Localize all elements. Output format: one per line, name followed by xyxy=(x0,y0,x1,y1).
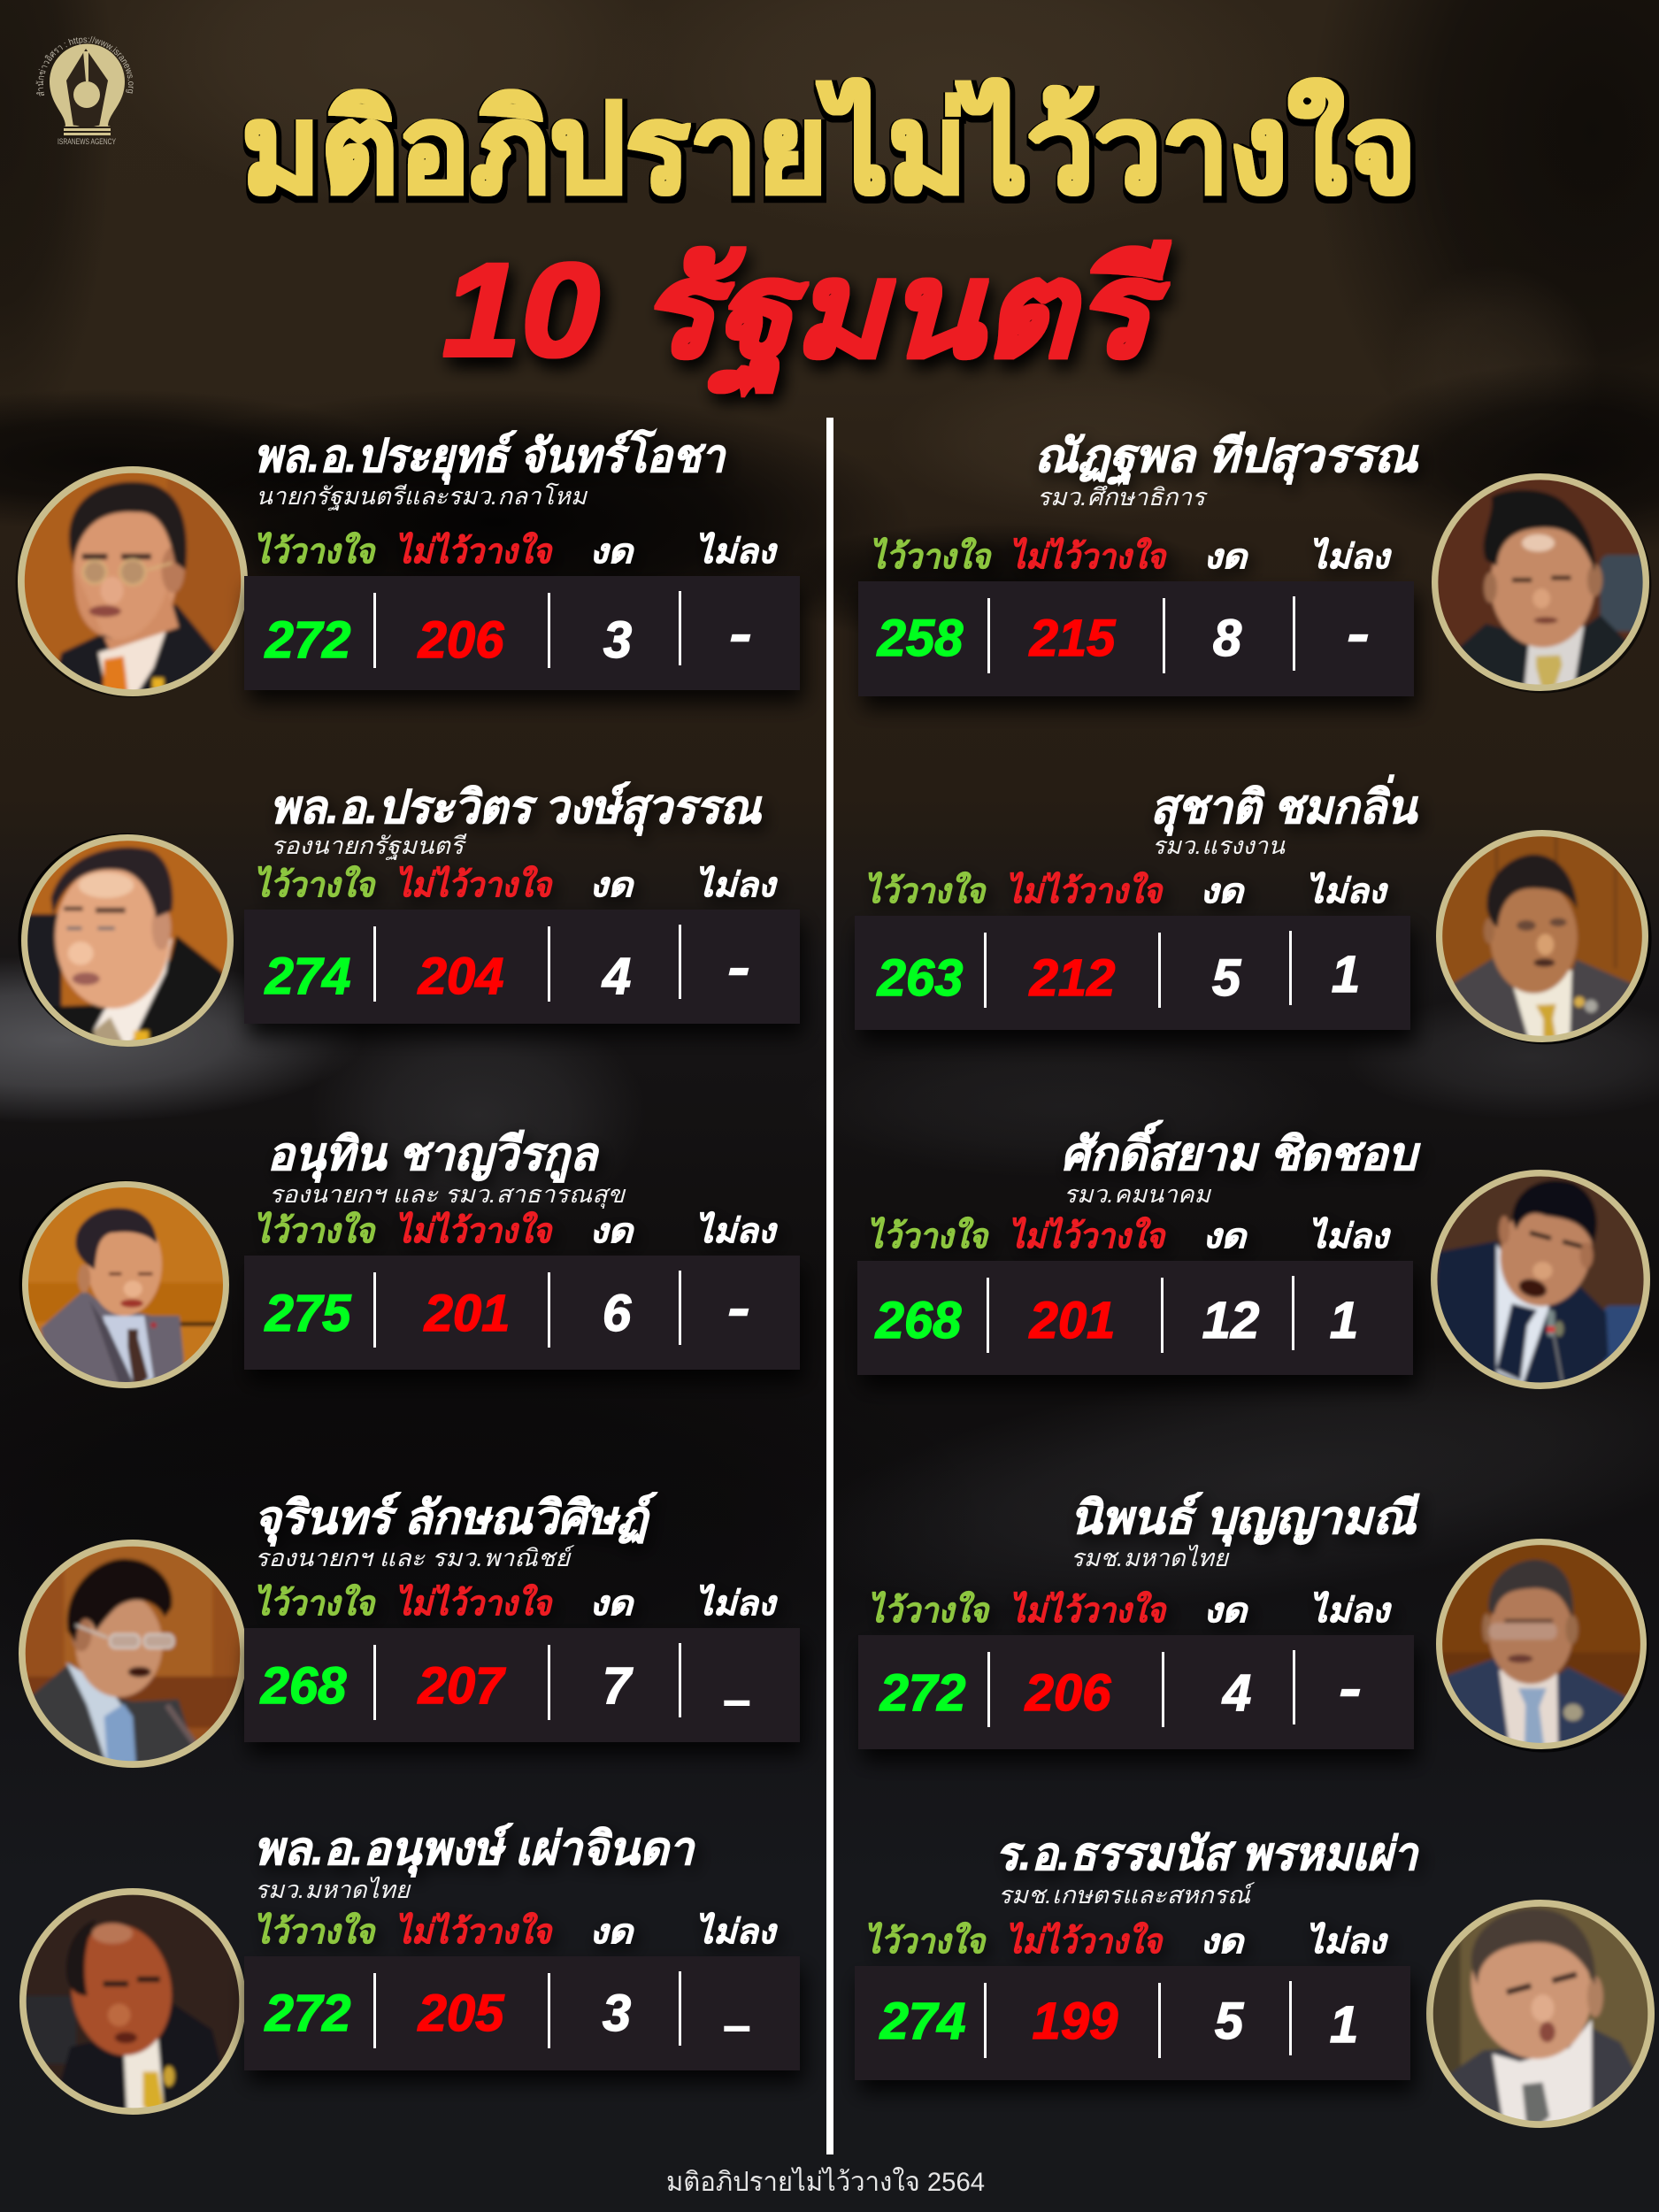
name: ศักดิ์สยาม ชิดชอบ xyxy=(1061,1120,1421,1180)
column labels: งด xyxy=(589,1213,635,1250)
vote numbers: 215 xyxy=(1029,610,1116,667)
portrait: Nataphol xyxy=(1432,473,1651,693)
vote numbers: 7 xyxy=(603,1657,634,1715)
column labels: ไว้วางใจ xyxy=(254,1211,377,1250)
table background xyxy=(244,576,800,690)
column labels: ไว้วางใจ xyxy=(867,1217,990,1256)
vote numbers: 268 xyxy=(260,1657,347,1715)
vote table xyxy=(244,1211,800,1370)
vote table xyxy=(244,1584,800,1742)
vote numbers xyxy=(265,939,750,1005)
portrait: Anutin xyxy=(19,1180,229,1388)
vote numbers: 258 xyxy=(877,610,964,667)
column labels: ไม่ไว้วางใจ xyxy=(1010,1591,1168,1630)
vote numbers: 4 xyxy=(1222,1664,1251,1722)
vote table xyxy=(855,1922,1410,2080)
column labels: งด xyxy=(1200,873,1246,910)
column labels: ไม่ไว้วางใจ xyxy=(1010,537,1168,576)
vote numbers xyxy=(879,1660,1361,1722)
vote numbers: 274 xyxy=(879,1993,965,2050)
vote numbers: 207 xyxy=(418,1657,506,1715)
column labels: ไว้วางใจ xyxy=(864,872,987,910)
role: รมว.คมนาคม xyxy=(1064,1181,1211,1208)
vote numbers: 263 xyxy=(877,949,963,1007)
name: อนุทิน ชาญวีรกูล xyxy=(267,1129,600,1183)
column labels: ไม่ไว้วางใจ xyxy=(1009,1217,1167,1256)
vote numbers xyxy=(879,1993,1358,2054)
vote numbers: 201 xyxy=(424,1285,510,1342)
panel: Anutin xyxy=(19,1129,800,1388)
column labels: งด xyxy=(1203,1593,1249,1630)
panel: Prawit xyxy=(18,781,800,1047)
name: สุชาติ ชมกลิ่น xyxy=(1150,774,1418,836)
column labels: ไม่ลง xyxy=(1310,1591,1393,1630)
table background xyxy=(855,1966,1410,2080)
vote table xyxy=(244,532,800,690)
column labels xyxy=(254,532,779,571)
column labels: ไม่ไว้วางใจ xyxy=(396,865,554,904)
panel: Suchart xyxy=(855,774,1652,1044)
portrait: Nipon xyxy=(1436,1539,1648,1753)
vote table xyxy=(858,537,1414,696)
table background xyxy=(244,910,800,1024)
role: รมช.เกษตรและสหกรณ์ xyxy=(998,1882,1256,1909)
panel: Saksayam xyxy=(857,1120,1650,1389)
column labels: งด xyxy=(1202,1218,1248,1256)
column labels: ไม่ลง xyxy=(1309,1217,1392,1256)
portrait: Prayut xyxy=(15,466,248,697)
column labels: งด xyxy=(589,534,635,571)
vote numbers: - xyxy=(727,939,750,996)
column labels: งด xyxy=(1203,539,1249,576)
column labels: ไม่ลง xyxy=(695,865,779,904)
role: รองนายกรัฐมนตรี xyxy=(271,833,467,861)
column labels: ไม่ลง xyxy=(1306,1922,1389,1961)
vote numbers: _ xyxy=(725,1652,750,1709)
column labels: ไว้วางใจ xyxy=(254,1912,377,1951)
vote numbers xyxy=(265,1279,750,1342)
role: รองนายกฯ และ รมว.สาธารณสุข xyxy=(269,1181,626,1210)
panel: Nipon xyxy=(858,1492,1648,1753)
role: รมว.มหาดไทย xyxy=(255,1876,411,1903)
table background xyxy=(244,1628,800,1742)
vote numbers: 3 xyxy=(603,611,632,669)
role: รองนายกฯ และ รมว.พาณิชย์ xyxy=(255,1545,575,1571)
column labels: งด xyxy=(589,1914,635,1951)
column labels xyxy=(254,1584,779,1623)
name: ณัฏฐพล ทีปสุวรรณ xyxy=(1034,431,1419,486)
vote numbers: 212 xyxy=(1029,949,1115,1007)
portrait: Jurin xyxy=(19,1540,247,1768)
panel: Thammanat xyxy=(855,1829,1655,2128)
role: นายกรัฐมนตรีและรมว.กลาโหม xyxy=(256,482,588,511)
portrait: Saksayam xyxy=(1431,1170,1650,1389)
column labels: ไม่ลง xyxy=(695,532,779,571)
column labels: ไม่ไว้วางใจ xyxy=(396,532,554,571)
name: พล.อ.ประยุทธ์ จันทร์โอชา xyxy=(254,428,727,485)
vote numbers: 1 xyxy=(1332,946,1360,1003)
vote numbers xyxy=(260,1652,750,1715)
vote numbers: 272 xyxy=(265,611,350,669)
vote numbers: - xyxy=(1340,1660,1361,1717)
table background xyxy=(855,916,1410,1030)
column labels: ไม่ลง xyxy=(695,1584,779,1623)
vote numbers xyxy=(875,1292,1358,1349)
table background xyxy=(244,1956,800,2070)
vote numbers xyxy=(877,605,1370,667)
vote numbers: 5 xyxy=(1215,1993,1244,2050)
column labels: ไว้วางใจ xyxy=(254,865,377,904)
column labels: ไม่ไว้วางใจ xyxy=(1006,1922,1164,1961)
column labels: งด xyxy=(589,867,635,904)
column labels: งด xyxy=(589,1586,635,1623)
vote numbers: 199 xyxy=(1033,1993,1118,2050)
panel: Anupong xyxy=(19,1823,800,2115)
column labels xyxy=(864,872,1389,910)
name: ร.อ.ธรรมนัส พรหมเผ่า xyxy=(995,1829,1420,1880)
column labels xyxy=(864,1922,1389,1961)
table background xyxy=(857,1261,1413,1375)
name: พล.อ.ประวิตร วงษ์สุวรรณ xyxy=(270,781,763,836)
portrait: Suchart xyxy=(1436,830,1652,1044)
column labels: ไม่ไว้วางใจ xyxy=(396,1584,554,1623)
table background xyxy=(244,1256,800,1370)
vote numbers: 8 xyxy=(1213,610,1242,667)
column labels: ไว้วางใจ xyxy=(864,1922,987,1961)
vote numbers: 1 xyxy=(1330,1996,1358,2054)
vote numbers: 3 xyxy=(603,1985,631,2042)
name: พล.อ.อนุพงษ์ เผ่าจินดา xyxy=(254,1823,696,1878)
vote numbers: 5 xyxy=(1212,949,1241,1007)
column labels: ไว้วางใจ xyxy=(870,537,993,576)
table background xyxy=(858,1635,1414,1749)
vote numbers: 204 xyxy=(418,948,503,1005)
vote numbers: 272 xyxy=(265,1985,350,2042)
column labels: ไม่ไว้วางใจ xyxy=(396,1211,554,1250)
vote numbers: 274 xyxy=(265,948,350,1005)
panel: Nataphol xyxy=(858,431,1651,696)
vote numbers xyxy=(265,1978,750,2042)
logo: Isranews Agency xyxy=(35,35,134,147)
vote numbers: - xyxy=(727,1279,750,1337)
column labels xyxy=(867,1217,1392,1256)
column labels: ไม่ลง xyxy=(1310,537,1393,576)
column labels: ไม่ลง xyxy=(695,1211,779,1250)
role: รมว.ศึกษาธิการ xyxy=(1037,484,1209,511)
vote numbers: - xyxy=(1347,605,1370,663)
column labels: ไว้วางใจ xyxy=(868,1591,991,1630)
column labels xyxy=(870,537,1393,576)
column labels xyxy=(254,865,779,904)
column labels xyxy=(868,1591,1393,1630)
vote table xyxy=(855,872,1410,1030)
vote numbers: 201 xyxy=(1029,1292,1115,1349)
logo: Isranews Agency: ISRANEWS AGENCY xyxy=(58,137,116,147)
vote numbers xyxy=(877,946,1360,1007)
vote numbers: 272 xyxy=(879,1664,965,1722)
vote numbers: _ xyxy=(725,1978,750,2035)
column labels: ไม่ไว้วางใจ xyxy=(396,1912,554,1951)
vote numbers: 1 xyxy=(1330,1292,1358,1349)
name: นิพนธ์ บุญญามณี xyxy=(1070,1492,1420,1547)
table background xyxy=(858,581,1414,696)
panel: Jurin xyxy=(19,1492,800,1768)
vote numbers: 268 xyxy=(875,1292,962,1349)
column labels xyxy=(254,1211,779,1250)
vote table xyxy=(244,865,800,1024)
vote numbers: 6 xyxy=(603,1285,632,1342)
column labels: ไม่ลง xyxy=(1306,872,1389,910)
role: รมช.มหาดไทย xyxy=(1071,1544,1230,1571)
vote numbers: 205 xyxy=(418,1985,504,2042)
name: จุรินทร์ ลักษณวิศิษฏ์ xyxy=(254,1492,658,1547)
role: รมว.แรงงาน xyxy=(1152,833,1286,859)
title: 10 ministers: 10 รัฐมนตรี xyxy=(442,235,1171,396)
vote numbers: 12 xyxy=(1202,1292,1259,1349)
column labels: ไม่ลง xyxy=(695,1912,779,1951)
portrait: Prawit xyxy=(18,833,234,1047)
panel: Prayut xyxy=(15,428,800,697)
vote table xyxy=(858,1591,1414,1749)
column labels xyxy=(254,1912,779,1951)
column labels: ไว้วางใจ xyxy=(254,1584,377,1623)
portrait: Anupong xyxy=(19,1888,246,2115)
vote table xyxy=(244,1912,800,2070)
vote numbers: - xyxy=(729,605,752,663)
centre divider xyxy=(826,418,833,2154)
footer caption: มติอภิปรายไม่ไว้วางใจ 2564 xyxy=(666,2166,985,2197)
title: main heading: มติอภิปรายไม่ไว้วางใจ xyxy=(242,78,1417,219)
vote numbers: 275 xyxy=(265,1285,351,1342)
column labels: ไว้วางใจ xyxy=(254,532,377,571)
column labels: งด xyxy=(1200,1924,1246,1961)
vote numbers: 4 xyxy=(602,948,631,1005)
column labels: ไม่ไว้วางใจ xyxy=(1006,872,1164,910)
portrait: Thammanat xyxy=(1426,1900,1655,2128)
logo: Isranews Agency: สำนักข่าวอิศรา : https://www.isranews.org xyxy=(35,35,134,96)
vote numbers xyxy=(265,605,752,669)
vote table xyxy=(857,1217,1413,1375)
vote numbers: 206 xyxy=(418,611,504,669)
vote numbers: 206 xyxy=(1025,1664,1111,1722)
